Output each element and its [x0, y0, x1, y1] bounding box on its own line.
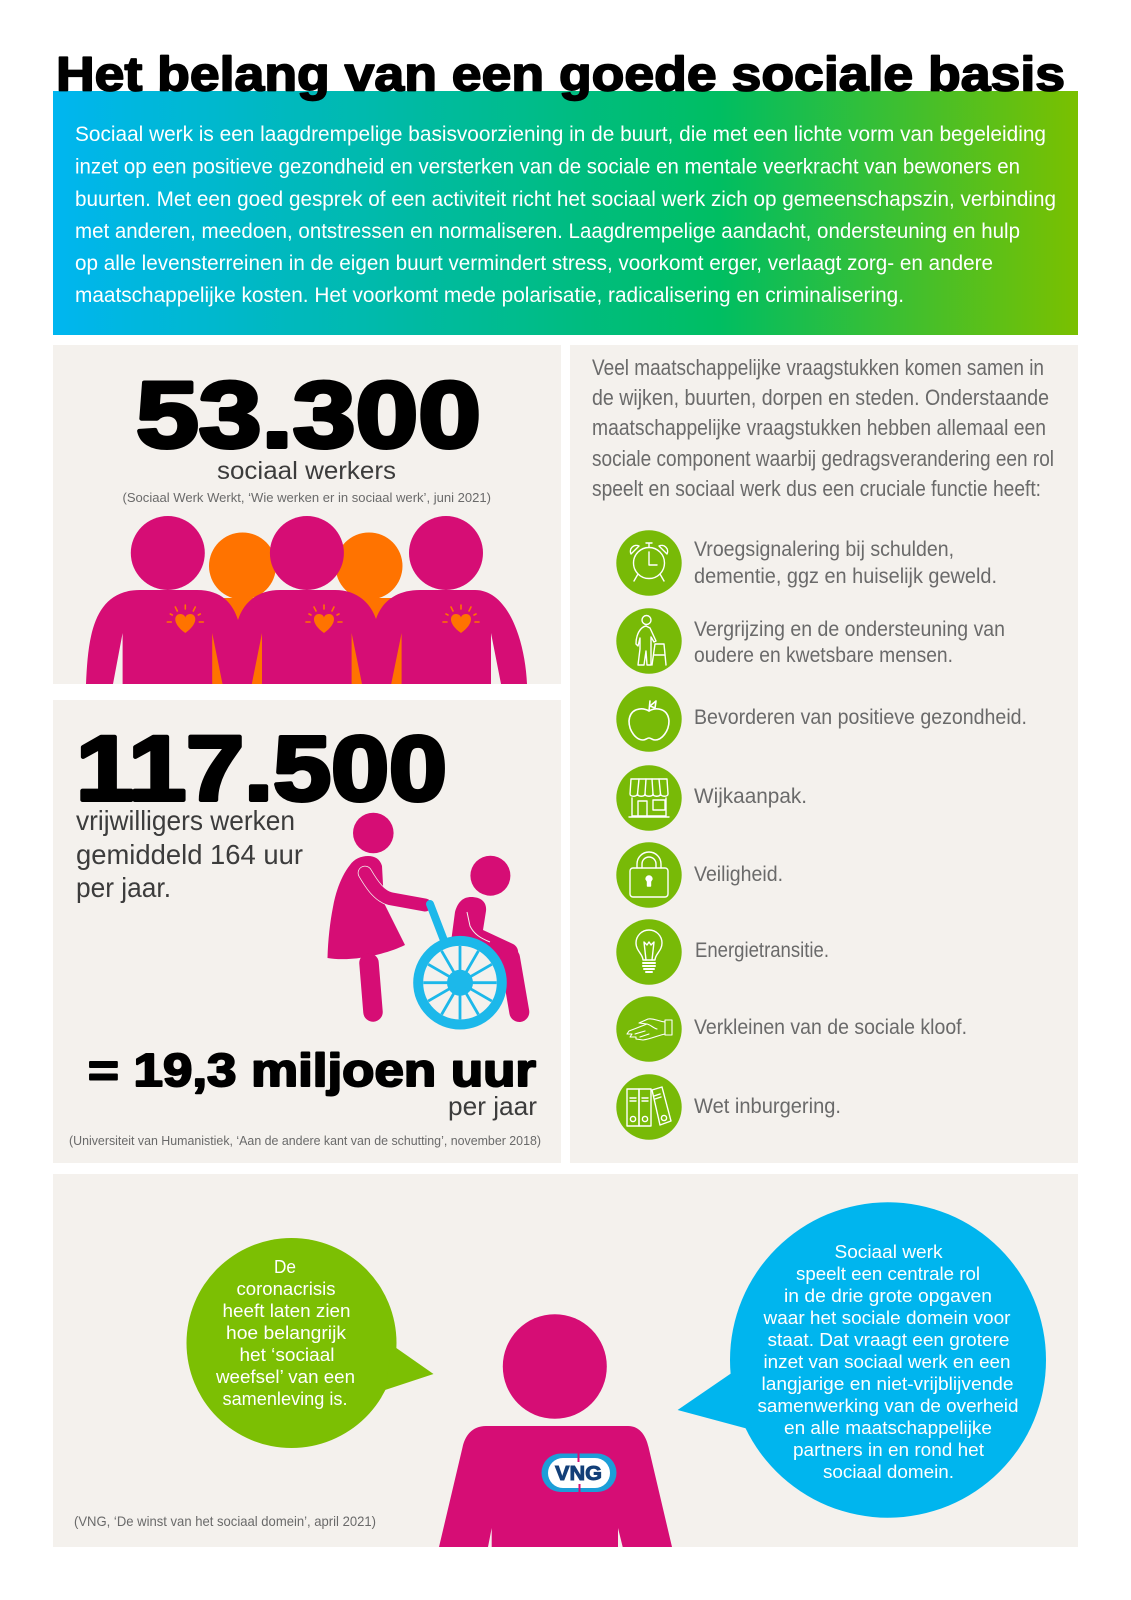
speech bubble: sociaal werk: partners in en rond het	[793, 1439, 984, 1460]
label: per jaar: per jaar	[448, 1091, 537, 1121]
text: vergrijzing	[694, 618, 1005, 667]
intro text block: met anderen, meedoen, ontstressen en normaliseren. Laagdrempelige aandacht, ondersteuning en hulp	[75, 219, 1020, 243]
item: wet inburgering	[616, 1074, 841, 1140]
logo: VNG	[542, 1453, 616, 1493]
text: vrijwilligers werken	[76, 805, 303, 903]
intro text block: buurten. Met een goed gesprek of een activiteit richt het sociaal werk zich op gemeenschapszin, verbinding	[75, 187, 1056, 211]
icon: padlock	[630, 852, 668, 897]
speech bubble: sociaal werk: waar het sociale domein voor	[762, 1307, 1010, 1328]
item: veiligheid	[616, 842, 783, 908]
panel: intro gradient	[53, 91, 1078, 335]
item: wijkaanpak	[616, 765, 807, 831]
item: vroegsignalering	[616, 530, 997, 596]
speech bubble: coronacrisis	[186, 1238, 434, 1448]
icon: binders	[627, 1087, 671, 1126]
speech bubble: coronacrisis: weefsel’ van een	[215, 1366, 355, 1387]
speech bubble: sociaal werk: Sociaal werk	[834, 1241, 943, 1262]
icon: person with walker	[636, 616, 666, 665]
text: sociale kloof: Verkleinen van de sociale kloof.	[694, 1016, 967, 1039]
panel: maatschappelijke vraagstukken	[570, 345, 1078, 1163]
icon: heart left	[167, 605, 203, 633]
icon: alarm clock	[630, 543, 668, 581]
panel: vrijwilligers	[53, 700, 561, 1163]
speech bubble: sociaal werk: langjarige en niet-vrijblijvende	[762, 1373, 1014, 1394]
text: vroegsignalering	[694, 538, 997, 588]
source: VNG: (VNG, ‘De winst van het sociaal domein’, april 2021)	[74, 1513, 376, 1529]
label: sociaal werkers: sociaal werkers	[217, 457, 396, 485]
intro text block: Sociaal werk is een laagdrempelige basisvoorziening in de buurt, die met een lichte vorm van begeleiding	[75, 122, 1046, 146]
item: sociale kloof	[616, 996, 967, 1062]
item: vergrijzing	[616, 608, 1005, 674]
speech bubble: sociaal werk	[678, 1202, 1046, 1518]
text: vrijwilligers werken: vrijwilligers werken	[76, 805, 295, 836]
speech bubble: sociaal werk: samenwerking van de overheid	[758, 1395, 1018, 1416]
illustration: group of people with hearts	[86, 516, 527, 684]
intro text block: maatschappelijke kosten. Het voorkomt mede polarisatie, radicalisering en criminalisering.	[75, 283, 904, 307]
intro paragraph	[592, 355, 1054, 501]
text: energietransitie: Energietransitie.	[695, 939, 829, 962]
speech bubble: coronacrisis: De	[274, 1256, 296, 1277]
text: vroegsignalering: Vroegsignalering bij schulden,	[694, 538, 954, 561]
icon: heart right	[443, 605, 479, 633]
text: vergrijzing: Vergrijzing en de ondersteuning van	[694, 618, 1005, 641]
item: positieve gezondheid	[616, 686, 1027, 752]
number: 53.300: 53.300	[136, 362, 481, 467]
panel: VNG quote	[53, 1174, 1078, 1547]
illustration: volunteer pushing wheelchair	[328, 813, 519, 1024]
intro text block	[75, 122, 1056, 307]
item: energietransitie	[616, 919, 829, 985]
speech bubble: coronacrisis: hoe belangrijk	[226, 1322, 347, 1343]
statistic: 19,3 miljoen uur: = 19,3 miljoen uur	[88, 1044, 536, 1096]
panel: sociaal werkers	[53, 345, 561, 684]
speech bubble: coronacrisis: coronacrisis	[236, 1278, 336, 1299]
icon: shop	[629, 779, 669, 817]
intro paragraph: sociale component waarbij gedragsverandering een rol	[592, 446, 1054, 471]
speech bubble: sociaal werk: inzet van sociaal werk en een	[764, 1351, 1010, 1372]
speech bubble: sociaal werk: sociaal domein.	[823, 1461, 954, 1482]
speech bubble: sociaal werk: in de drie grote opgaven	[784, 1285, 992, 1306]
text: wijkaanpak: Wijkaanpak.	[694, 785, 807, 808]
source: Universiteit van Humanistiek: (Universiteit van Humanistiek, ‘Aan de andere kant van de schutting’, november 2018)	[69, 1133, 541, 1148]
text: vergrijzing: oudere en kwetsbare mensen.	[694, 644, 953, 667]
text: veiligheid: Veiligheid.	[694, 863, 783, 886]
logo: VNG: VNG	[555, 1463, 602, 1485]
intro paragraph: maatschappelijke vraagstukken hebben allemaal een	[592, 415, 1046, 440]
speech bubble: sociaal werk: staat. Dat vraagt een grotere	[768, 1329, 1010, 1350]
intro text block: op alle levensterreinen in de eigen buurt vermindert stress, voorkomt erger, verlaagt zorg- en andere	[75, 251, 993, 275]
intro paragraph: de wijken, buurten, dorpen en steden. Onderstaande	[592, 385, 1049, 410]
number: 117.500: 117.500	[76, 718, 447, 820]
title: Het belang van een goede sociale basis	[56, 48, 1065, 102]
text: vroegsignalering: dementie, ggz en huiselijk geweld.	[694, 565, 997, 588]
speech bubble: coronacrisis: heeft laten zien	[222, 1300, 350, 1321]
intro text block: inzet op een positieve gezondheid en versterken van de sociale en mentale veerkracht van bewoners en	[75, 154, 1020, 178]
text: vrijwilligers werken: gemiddeld 164 uur	[76, 839, 303, 870]
text: vrijwilligers werken: per jaar.	[76, 872, 171, 903]
speech bubble: sociaal werk: en alle maatschappelijke	[784, 1417, 992, 1438]
intro paragraph: speelt en sociaal werk dus een cruciale functie heeft:	[592, 476, 1041, 501]
speech bubble: coronacrisis: het ‘sociaal	[240, 1344, 334, 1365]
icon: heart centre	[306, 605, 342, 633]
text: wet inburgering: Wet inburgering.	[694, 1095, 841, 1118]
icon: apple	[629, 701, 669, 740]
speech bubble: sociaal werk: speelt een centrale rol	[796, 1263, 980, 1284]
intro paragraph: Veel maatschappelijke vraagstukken komen samen in	[592, 355, 1044, 380]
icon: light bulb	[636, 930, 662, 972]
illustration: person with VNG logo	[439, 1314, 672, 1547]
icon: open hand	[627, 1019, 672, 1040]
speech bubble: coronacrisis: samenleving is.	[222, 1388, 348, 1409]
text: positieve gezondheid: Bevorderen van positieve gezondheid.	[694, 706, 1027, 729]
source: Sociaal Werk Werkt: (Sociaal Werk Werkt, ‘Wie werken er in sociaal werk’, juni 2021)	[122, 490, 491, 505]
